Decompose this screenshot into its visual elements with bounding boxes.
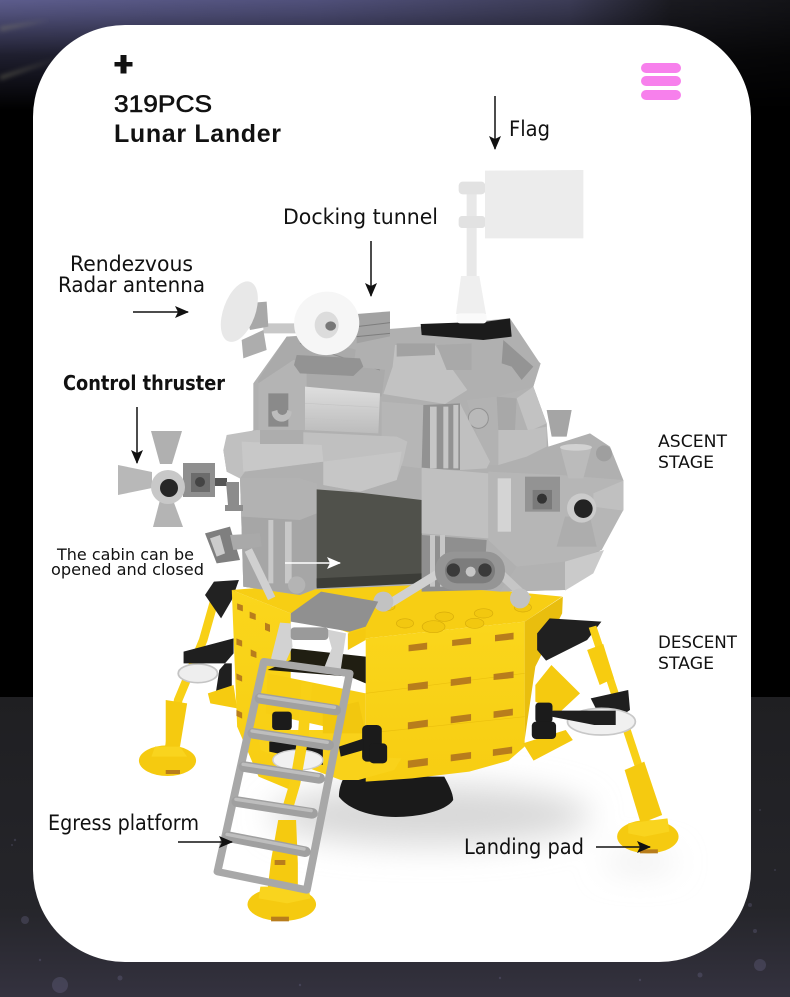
right thruster xyxy=(525,410,623,547)
clear ring front xyxy=(273,750,323,770)
ladder rails and rungs xyxy=(217,662,350,890)
shelf xyxy=(223,430,407,492)
right cheek xyxy=(467,387,547,465)
label: ascent stage: ASCENT xyxy=(658,432,728,452)
grey deck plate xyxy=(291,592,378,632)
front radar dish xyxy=(287,284,366,376)
cabin opening xyxy=(317,489,422,587)
title block: 319PCS xyxy=(114,91,212,118)
yellow left faces xyxy=(232,590,291,790)
label: control thruster: Control thruster xyxy=(63,371,225,395)
rear radar dish xyxy=(213,276,300,358)
studs on deck xyxy=(379,603,531,633)
label: ascent stage: STAGE xyxy=(658,453,714,473)
rear ledge xyxy=(208,685,237,708)
label: rendezvous radar antenna: Rendezvous xyxy=(70,252,193,276)
centre hip roof xyxy=(383,345,467,404)
title block: Lunar Lander xyxy=(114,120,281,148)
rendezvous antenna centre xyxy=(373,552,530,612)
black flag base xyxy=(421,318,512,340)
engine bell xyxy=(339,777,453,817)
label: rendezvous radar antenna xyxy=(58,252,205,312)
upper left roof xyxy=(258,337,387,397)
label: flag: Flag xyxy=(509,117,550,141)
flag xyxy=(456,170,583,323)
label: egress platform: Egress platform xyxy=(48,811,199,835)
hinge xyxy=(271,623,366,670)
floor shadow xyxy=(270,785,676,869)
right hip xyxy=(468,333,541,398)
light front panel xyxy=(305,387,380,433)
rear left leg xyxy=(139,580,239,776)
right door block xyxy=(422,468,488,538)
label: landing pad: Landing pad xyxy=(464,835,584,859)
lander: descent stage xyxy=(139,578,679,921)
lander: ascent stage xyxy=(205,170,623,612)
label: ascent stage xyxy=(658,432,728,473)
background: night sky xyxy=(0,0,790,100)
right step block xyxy=(523,665,580,761)
icon: pink menu xyxy=(641,63,681,100)
label: cabin note: opened and closed xyxy=(51,560,204,579)
label: descent stage: STAGE xyxy=(658,654,714,674)
black pins front xyxy=(269,712,387,765)
label: docking tunnel: Docking tunnel xyxy=(283,205,438,229)
label: flag xyxy=(495,96,550,149)
front recess under ladder xyxy=(267,648,366,683)
control thruster unit xyxy=(118,431,243,527)
right body xyxy=(488,472,623,567)
yellow front face xyxy=(366,622,525,782)
label: cabin note: The cabin can be xyxy=(56,545,194,564)
slots xyxy=(236,603,514,768)
label: descent stage xyxy=(658,633,738,674)
ladder assembly xyxy=(217,592,378,890)
yellow side face xyxy=(525,597,563,740)
label: rendezvous radar antenna: Radar antenna xyxy=(58,273,205,297)
right landing leg xyxy=(532,618,679,853)
title block xyxy=(114,55,281,148)
background: moon surface xyxy=(0,697,790,997)
yellow top deck xyxy=(232,578,562,638)
label: cabin note xyxy=(51,545,340,579)
front leg xyxy=(247,683,316,921)
body silhouette xyxy=(223,318,623,595)
tunnel stack xyxy=(357,311,390,347)
lower struts xyxy=(422,535,487,592)
left steerable antenna xyxy=(205,527,305,598)
centre pillar xyxy=(382,402,423,468)
label: descent stage: DESCENT xyxy=(658,633,738,653)
lower left wall xyxy=(240,478,317,595)
